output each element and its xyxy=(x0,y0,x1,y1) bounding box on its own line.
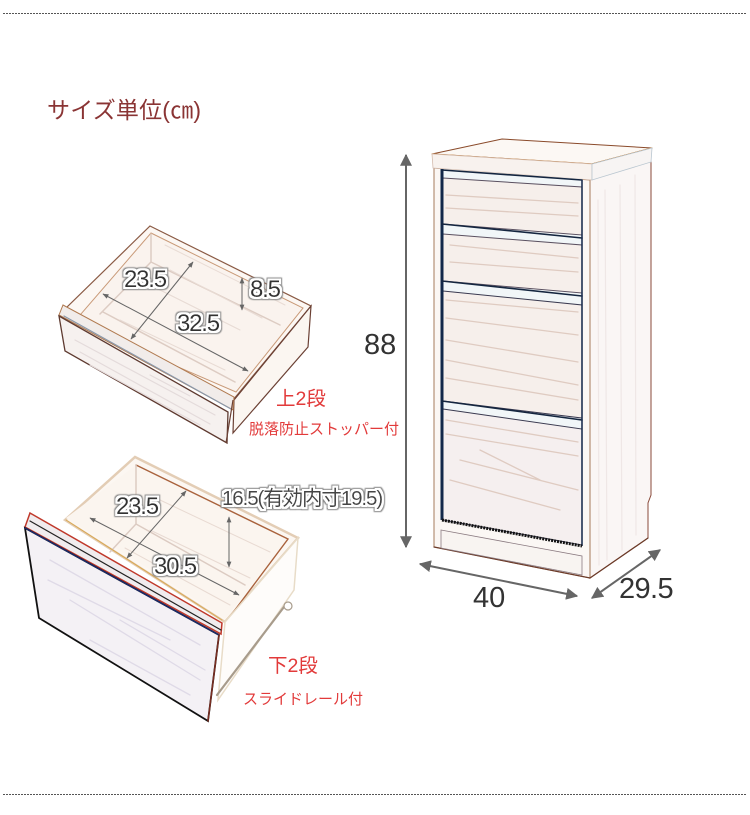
lower drawer interior xyxy=(65,457,298,622)
lower drawer right side xyxy=(218,538,298,700)
drawer front lip xyxy=(59,305,234,410)
drawer 4 xyxy=(443,409,582,545)
label: 8.5: 8.5 xyxy=(250,276,281,303)
arrow: width 30.5 xyxy=(90,518,239,595)
drawer 2 xyxy=(443,234,582,293)
drawer front panel xyxy=(59,316,228,443)
chest top edge front xyxy=(432,154,592,180)
arrow: width 40 xyxy=(420,564,577,596)
label: upper 2 tiers: 上2段 xyxy=(276,388,326,410)
label: 23.5: 23.5 xyxy=(124,266,167,293)
slide rail xyxy=(217,603,287,695)
top dotted divider xyxy=(3,12,747,14)
lower drawer dimensions xyxy=(90,487,382,595)
frame shadow lines xyxy=(440,169,444,520)
bottom dotted divider xyxy=(3,794,747,796)
label: 32.5: 32.5 xyxy=(177,310,220,337)
chest top edge side xyxy=(592,148,652,180)
illustration: upper drawer xyxy=(59,226,311,443)
arrow: depth 23.5 xyxy=(131,262,193,339)
chest right side xyxy=(590,160,651,578)
arrow: depth 23.5 xyxy=(127,491,186,558)
chest dimensions xyxy=(364,155,673,614)
chest front body xyxy=(434,168,590,578)
illustration: lower drawer xyxy=(25,457,298,721)
label: 29.5: 29.5 xyxy=(619,573,673,605)
label: slide rail: スライドレール付 xyxy=(243,691,363,708)
plinth xyxy=(441,530,582,575)
label: anti-drop stopper: 脱落防止ストッパー付 xyxy=(249,421,399,438)
arrow: depth 29.5 xyxy=(592,550,660,598)
arrow: height 16.5 xyxy=(228,517,230,567)
label: 40: 40 xyxy=(473,582,505,614)
drawer 3 xyxy=(443,291,582,418)
title: サイズ単位(㎝) xyxy=(47,97,201,123)
drawer interior xyxy=(64,226,311,400)
arrow: width 32.5 xyxy=(103,294,248,371)
drawer right side xyxy=(233,306,311,433)
lower drawer lip xyxy=(25,513,222,634)
label: 23.5: 23.5 xyxy=(116,493,159,520)
interior opening strips xyxy=(442,169,582,546)
wood grain xyxy=(446,195,578,510)
label: lower 2 tiers: 下2段 xyxy=(268,655,318,677)
upper drawer dimensions xyxy=(103,262,281,371)
arrow: height 8.5 xyxy=(241,278,243,310)
chest top xyxy=(432,139,652,164)
label: 88: 88 xyxy=(364,329,396,361)
lower drawer front panel xyxy=(25,528,219,721)
illustration: chest of drawers xyxy=(432,139,652,578)
arrow: height 88 xyxy=(405,155,407,547)
label: 16.5 effective: 16.5(有効内寸19.5) xyxy=(222,487,382,510)
drawer 1 xyxy=(443,178,582,235)
label: 30.5: 30.5 xyxy=(154,553,197,580)
